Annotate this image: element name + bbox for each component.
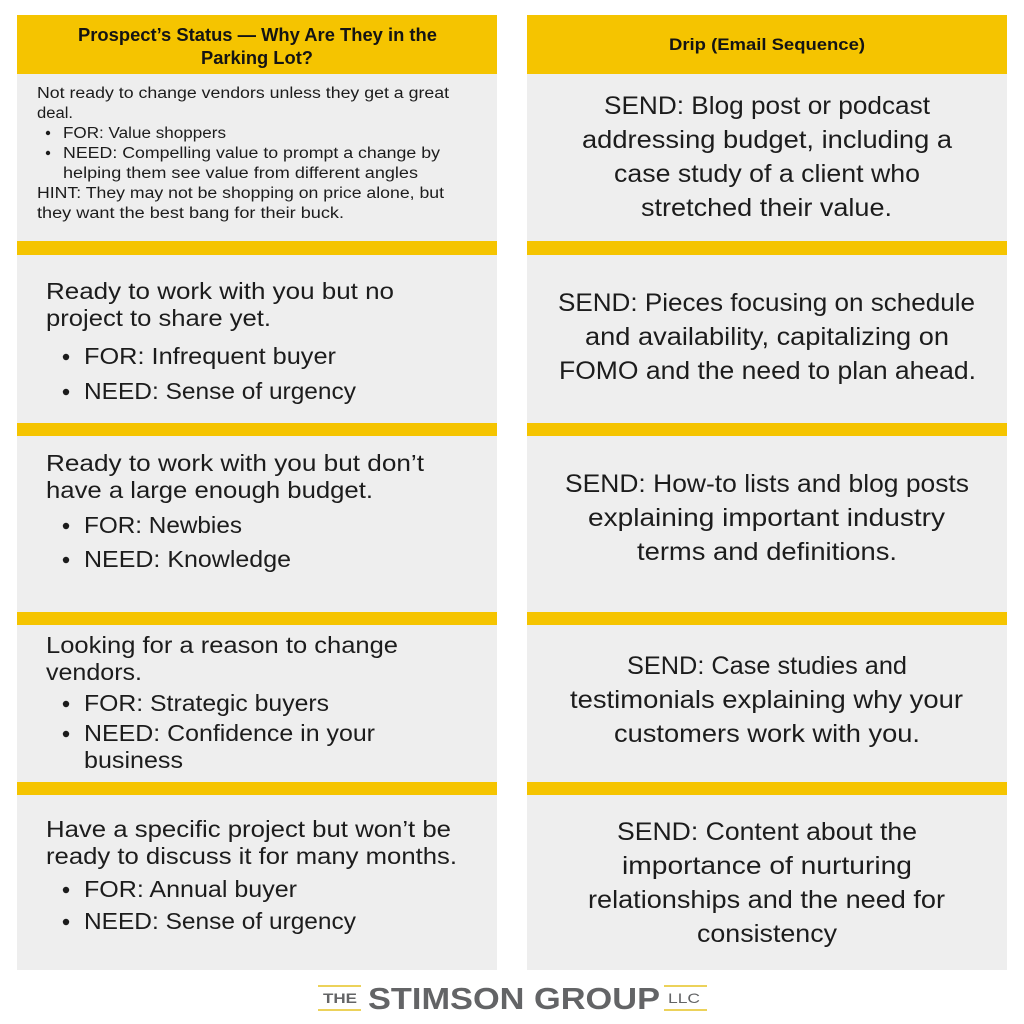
text block: annual buyer: Have a specific project but won’t be xyxy=(46,816,451,842)
text block: send nurturing content: importance of nurturing xyxy=(622,852,912,880)
text block: send case studies xyxy=(570,652,963,748)
text block: newbies: FOR: Newbies xyxy=(84,512,242,538)
text block: send schedule pieces: and availability, capitalizing on xyxy=(585,323,949,351)
text block: strategic buyers: business xyxy=(84,747,183,773)
text block: send blog post: case study of a client who xyxy=(614,160,920,188)
text block: value shoppers: HINT: They may not be shopping on price alone, but xyxy=(37,185,445,202)
text block: send schedule pieces: FOMO and the need to plan ahead. xyxy=(559,357,976,385)
text block: value shoppers: FOR: Value shoppers xyxy=(63,125,226,142)
text block: value shoppers: they want the best bang for their buck. xyxy=(37,205,344,222)
text block: annual buyer: NEED: Sense of urgency xyxy=(84,908,356,934)
text block: newbies: Ready to work with you but don’t xyxy=(46,450,425,476)
text block: strategic buyers xyxy=(46,632,398,773)
text block: infrequent buyer: FOR: Infrequent buyer xyxy=(84,343,336,369)
text block: send how-to lists: SEND: How-to lists and blog posts xyxy=(565,470,969,498)
logo: The Stimson Group LLC: THE xyxy=(323,990,357,1006)
text block: value shoppers: helping them see value from different angles xyxy=(63,165,418,182)
text block: send blog post: SEND: Blog post or podcast xyxy=(604,92,930,120)
logo: The Stimson Group LLC xyxy=(318,981,707,1016)
text block: send case studies: testimonials explaining why your xyxy=(570,686,963,714)
heading: drip email sequence xyxy=(527,15,1007,74)
logo: The Stimson Group LLC: LLC xyxy=(668,990,700,1006)
text block: send how-to lists: explaining important industry xyxy=(588,504,946,532)
text block: annual buyer xyxy=(46,816,457,934)
text block: annual buyer: FOR: Annual buyer xyxy=(84,876,297,902)
text block: value shoppers xyxy=(37,85,450,222)
text block: send case studies: customers work with you. xyxy=(614,720,920,748)
text block: strategic buyers: vendors. xyxy=(46,659,142,685)
text block: value shoppers: NEED: Compelling value to prompt a change by xyxy=(63,145,440,162)
text block: send nurturing content: relationships and the need for xyxy=(588,886,945,914)
heading: prospect status xyxy=(17,15,497,74)
text block: strategic buyers: Looking for a reason to change xyxy=(46,632,398,658)
heading: prospect status: Parking Lot? xyxy=(201,48,313,68)
text block: send blog post: addressing budget, including a xyxy=(582,126,952,154)
heading: prospect status: Prospect’s Status — Why Are They in the xyxy=(78,25,437,45)
logo: The Stimson Group LLC: STIMSON GROUP xyxy=(368,981,660,1016)
text block: infrequent buyer: NEED: Sense of urgency xyxy=(84,378,356,404)
text block: newbies: have a large enough budget. xyxy=(46,477,373,503)
text block: infrequent buyer: Ready to work with you but no xyxy=(46,278,394,304)
heading: drip email sequence: Drip (Email Sequence) xyxy=(669,35,865,54)
text block: send how-to lists: terms and definitions. xyxy=(637,538,897,566)
text block: newbies xyxy=(46,450,425,572)
text block: send nurturing content xyxy=(588,818,945,948)
text block: value shoppers: Not ready to change vendors unless they get a great xyxy=(37,85,450,102)
text block: send nurturing content: SEND: Content about the xyxy=(617,818,917,846)
text block: send nurturing content: consistency xyxy=(697,920,838,948)
text block: send case studies: SEND: Case studies and xyxy=(627,652,907,680)
panel: drip email sequence column xyxy=(527,15,1007,970)
text block: send how-to lists xyxy=(565,470,969,566)
panel: prospect status column xyxy=(17,15,497,970)
text block: send schedule pieces: SEND: Pieces focusing on schedule xyxy=(558,289,975,317)
text block: strategic buyers: NEED: Confidence in your xyxy=(84,720,375,746)
text block: newbies: NEED: Knowledge xyxy=(84,546,291,572)
text block: infrequent buyer: project to share yet. xyxy=(46,305,271,331)
text block: send schedule pieces xyxy=(558,289,976,385)
text block: annual buyer: ready to discuss it for many months. xyxy=(46,843,457,869)
text block: value shoppers: deal. xyxy=(37,105,73,122)
text block: strategic buyers: FOR: Strategic buyers xyxy=(84,690,329,716)
text block: infrequent buyer xyxy=(46,278,394,404)
text block: send blog post: stretched their value. xyxy=(641,194,892,222)
text block: send blog post xyxy=(582,92,952,222)
